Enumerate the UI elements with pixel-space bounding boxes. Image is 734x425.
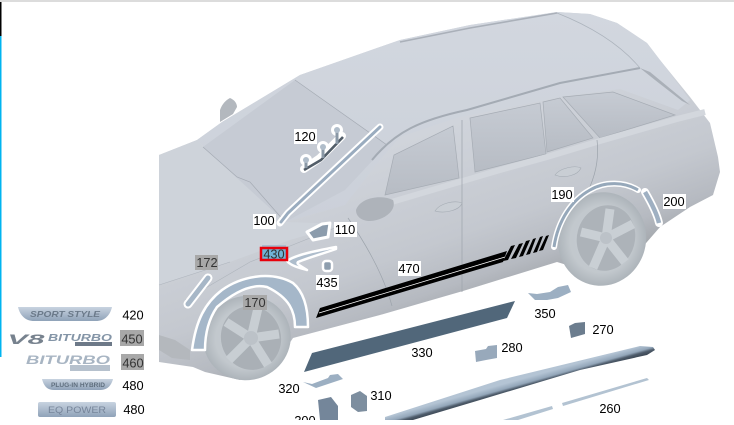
badge numbers — [120, 308, 145, 417]
badge: V8 biturbo — [8, 331, 112, 347]
badge: biturbo: BITURBO — [26, 353, 111, 367]
part 330: side panel — [304, 301, 515, 372]
icon: left mirror — [220, 98, 237, 122]
callout numbers: 270 — [592, 322, 614, 337]
callout numbers: 330 — [411, 345, 433, 360]
part 200: rear arch end — [645, 192, 659, 223]
part 430 highlight swoosh — [287, 247, 336, 270]
badge numbers: 420 — [122, 308, 144, 322]
callout numbers: 120 — [294, 129, 316, 144]
callout numbers: 200 — [663, 194, 685, 209]
badge: EQ power: EQ POWER — [48, 405, 107, 415]
part: door sill — [385, 346, 655, 420]
callout numbers: 310 — [370, 388, 392, 403]
badge: V8 biturbo: BITURBO — [48, 333, 112, 344]
beltline highlight — [378, 112, 705, 206]
part 310: clip — [351, 391, 367, 412]
callout numbers: 435 — [316, 275, 338, 290]
badge numbers: 450 — [121, 332, 143, 346]
callout numbers: 350 — [534, 306, 556, 321]
badge numbers: 480 — [122, 378, 144, 393]
badge: sport style — [18, 307, 112, 321]
badge: biturbo — [26, 353, 111, 371]
callout numbers: 172 — [196, 255, 218, 270]
windshield edges — [203, 80, 387, 222]
part 190: rear wheel arch — [554, 184, 638, 247]
bottom page mask — [0, 420, 734, 425]
part 110: bracket — [307, 223, 330, 240]
part 100: A-pillar trim — [280, 127, 380, 223]
part 170: front wheel arch — [192, 276, 308, 350]
badge: EQ power — [38, 402, 116, 417]
part 120: clips — [300, 124, 343, 170]
front wheel — [191, 283, 303, 393]
badge numbers: 460 — [122, 356, 144, 370]
callout numbers: 320 — [278, 381, 300, 396]
callout numbers: 170 — [244, 295, 266, 310]
icon: side mirror — [356, 197, 394, 221]
part 280: clip — [475, 345, 497, 362]
door lines — [348, 120, 598, 306]
part 270: clip — [569, 322, 585, 338]
windshield panel — [203, 80, 387, 222]
rear wheel — [547, 182, 657, 296]
callout numbers: 470 — [398, 261, 420, 276]
badge: plug-in hybrid: PLUG-IN HYBRID — [51, 383, 106, 389]
part 435: cap — [323, 261, 332, 271]
part 260: trim strips — [503, 378, 649, 420]
part 172: fender piece — [188, 278, 208, 304]
side windows — [385, 92, 675, 195]
part 350: bracket — [528, 285, 571, 300]
part 300: clip — [318, 397, 338, 420]
callout numbers: 100 — [253, 213, 275, 228]
fender crease — [159, 224, 345, 300]
hood — [159, 140, 345, 285]
callout numbers: 260 — [599, 401, 621, 416]
car body — [159, 12, 720, 380]
door handles — [435, 167, 581, 212]
side stripe decal — [316, 235, 549, 318]
roof rails — [372, 68, 640, 160]
callout numbers — [195, 129, 686, 425]
roof and upper panels — [197, 12, 690, 222]
callout numbers: 280 — [501, 340, 523, 355]
part 320: bracket — [303, 374, 343, 388]
callout numbers: 110 — [335, 222, 355, 237]
car illustration — [159, 12, 720, 393]
rear spoiler and hatch line — [557, 13, 640, 68]
badge: V8 biturbo: V8 — [8, 331, 45, 347]
badge: sport style: SPORT STYLE — [30, 309, 100, 319]
callout numbers: 190 — [551, 187, 573, 202]
badge: plug-in hybrid — [42, 379, 113, 390]
callout 430 highlighted: 430 — [263, 246, 285, 262]
front bumper grille — [159, 335, 190, 360]
badge numbers: 480 — [123, 402, 145, 417]
